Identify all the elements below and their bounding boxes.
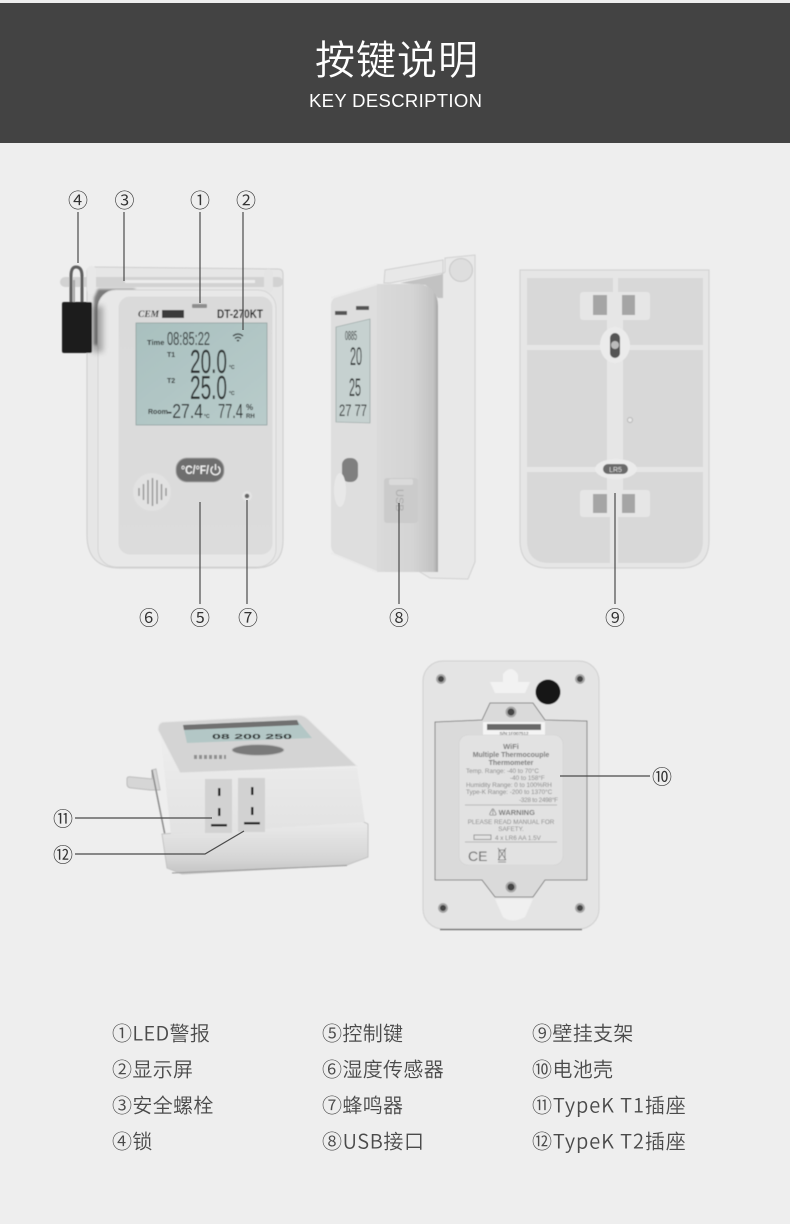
rear housing <box>423 661 599 929</box>
LCD display: T1 <box>167 352 175 359</box>
LCD display: 08:85:22 <box>167 329 210 349</box>
spec label: -40 to 158°F <box>510 774 545 782</box>
front end face <box>160 730 365 835</box>
callout numbers: ⑨ <box>605 602 625 631</box>
legend column 1: ③安全螺栓 <box>112 1090 214 1118</box>
hose barb <box>127 769 160 790</box>
LCD display: 77.4 <box>218 401 243 423</box>
control button <box>176 458 224 482</box>
LCD display: Room <box>148 409 168 416</box>
tilted LCD <box>183 720 312 743</box>
legend column 3: ⑪TypeK T1插座 <box>532 1090 687 1118</box>
T2 socket <box>238 778 265 832</box>
brand logo <box>138 310 184 320</box>
legend column 2 <box>322 1018 444 1154</box>
LCD display: T2 <box>167 378 175 385</box>
centre ribs <box>607 320 623 490</box>
spec label: 4 x LR6 AA 1.5V <box>495 835 542 842</box>
LCD display: RH <box>246 414 255 420</box>
wifi icon <box>233 334 243 341</box>
side body <box>377 284 438 572</box>
battery cover <box>435 703 587 897</box>
side LCD: 25 <box>349 374 361 402</box>
model name: DT-270KT <box>217 307 264 321</box>
spec label: Type-K Range: -200 to 1370°C <box>466 788 553 796</box>
LCD display: °C <box>204 414 210 420</box>
legend column 1: ①LED警报 <box>112 1018 210 1046</box>
legend column 3: ⑫TypeK T2插座 <box>532 1126 687 1154</box>
side button <box>342 458 358 482</box>
side bracket <box>420 255 475 579</box>
device: wall bracket rear <box>520 270 709 568</box>
side bolt <box>384 260 443 283</box>
top face <box>158 715 357 773</box>
legend column 2: ⑧USB接口 <box>322 1126 425 1154</box>
brand logo: CEM <box>138 310 160 320</box>
bottom clip <box>580 490 650 517</box>
spec label: Humidity Range: 0 to 100%RH <box>466 782 552 789</box>
legend column 2: ⑤控制键 <box>322 1018 403 1046</box>
legend column 2: ⑥湿度传感器 <box>322 1054 444 1082</box>
device: side view <box>331 255 475 579</box>
tilted LCD: 08 200 250 <box>212 734 292 741</box>
LCD display: °C <box>229 365 235 371</box>
side LCD: 27 77 <box>339 401 367 420</box>
device: front view <box>60 266 283 568</box>
callout numbers: ⑧ <box>389 602 409 631</box>
top clip <box>580 292 650 320</box>
device: rear view <box>423 661 599 930</box>
side LCD <box>336 319 370 423</box>
recessed panels <box>527 278 703 563</box>
tilted speaker <box>194 755 226 759</box>
humidity sensor vents <box>133 473 171 511</box>
buzzer hole <box>242 491 252 501</box>
front face in perspective <box>331 284 377 572</box>
LCD display: °C <box>229 391 235 397</box>
side LCD: 20 <box>350 343 362 371</box>
callout numbers: ② <box>236 184 256 214</box>
legend column 3 <box>532 1018 687 1154</box>
callout numbers: ① <box>190 184 210 214</box>
legend column 3: ⑨壁挂支架 <box>532 1018 634 1046</box>
LCD display: 20.0 <box>190 343 227 380</box>
USB port cover <box>384 478 418 523</box>
wall bracket behind device <box>87 267 283 568</box>
security bolt <box>60 266 283 294</box>
subtitle: KEY DESCRIPTION <box>309 90 482 111</box>
callout numbers: ⑥ <box>139 602 159 631</box>
tilted button <box>232 744 284 756</box>
spec label: CE <box>468 848 487 864</box>
bracket plate <box>520 270 709 568</box>
spec label: WiFi <box>503 742 519 751</box>
rear plate edge <box>152 770 170 860</box>
spec label: PLEASE READ MANUAL FOR <box>468 819 555 826</box>
callout numbers: ⑤ <box>190 602 210 631</box>
spec label <box>459 735 563 865</box>
legend column 2: ⑦蜂鸣器 <box>322 1090 403 1118</box>
callout numbers: ⑩ <box>652 761 672 790</box>
keyhole <box>490 669 530 693</box>
spec label: -328 to 2498°F <box>519 796 558 804</box>
side vent bulge <box>334 473 346 507</box>
LED indicator <box>192 304 207 308</box>
lower notch <box>495 899 533 920</box>
callout numbers <box>53 184 672 868</box>
barcode: S/N:1F007512 <box>499 731 529 736</box>
LR5 badge <box>595 459 637 479</box>
title: 按键说明 <box>315 28 479 86</box>
corner screws <box>437 675 584 912</box>
sensor port <box>536 680 560 704</box>
callout numbers: ⑫ <box>53 839 73 868</box>
spec label: Temp. Range: -40 to 70°C <box>466 767 539 775</box>
device body <box>98 290 276 567</box>
callout numbers: ⑪ <box>53 803 73 832</box>
spec label: SAFETY. <box>498 826 524 833</box>
shadow behind body <box>94 289 135 345</box>
spec label: Multiple Thermocouple <box>473 752 549 759</box>
screw slot <box>600 327 630 363</box>
LR5 badge: LR5 <box>609 467 622 474</box>
base plate <box>162 820 368 874</box>
callout numbers: ③ <box>114 184 134 214</box>
control button: °C/°F/ <box>181 465 210 477</box>
header banner <box>0 3 790 143</box>
device: bottom view <box>127 715 368 874</box>
leader lines <box>75 212 650 854</box>
T1 socket <box>205 779 232 833</box>
callout numbers: ④ <box>68 184 88 214</box>
side logo text <box>335 306 369 315</box>
LCD display: -27.4 <box>167 401 203 423</box>
LCD display <box>136 323 267 425</box>
legend column 1 <box>112 1018 214 1154</box>
LCD display: 25.0 <box>190 369 227 406</box>
USB port cover: USB <box>393 489 405 512</box>
LCD display: Time <box>147 338 164 347</box>
callout numbers: ⑦ <box>238 602 258 631</box>
side LCD: 0885 <box>345 328 357 343</box>
legend column 3: ⑩电池壳 <box>532 1054 613 1082</box>
spec label: ⚠ WARNING <box>489 808 535 817</box>
hole <box>628 418 632 422</box>
LCD display: % <box>246 403 253 412</box>
spec label: Thermometer <box>489 760 534 767</box>
legend column 1: ②显示屏 <box>112 1054 193 1082</box>
barcode <box>483 722 545 736</box>
legend column 1: ④锁 <box>112 1126 153 1154</box>
padlock <box>62 267 103 353</box>
